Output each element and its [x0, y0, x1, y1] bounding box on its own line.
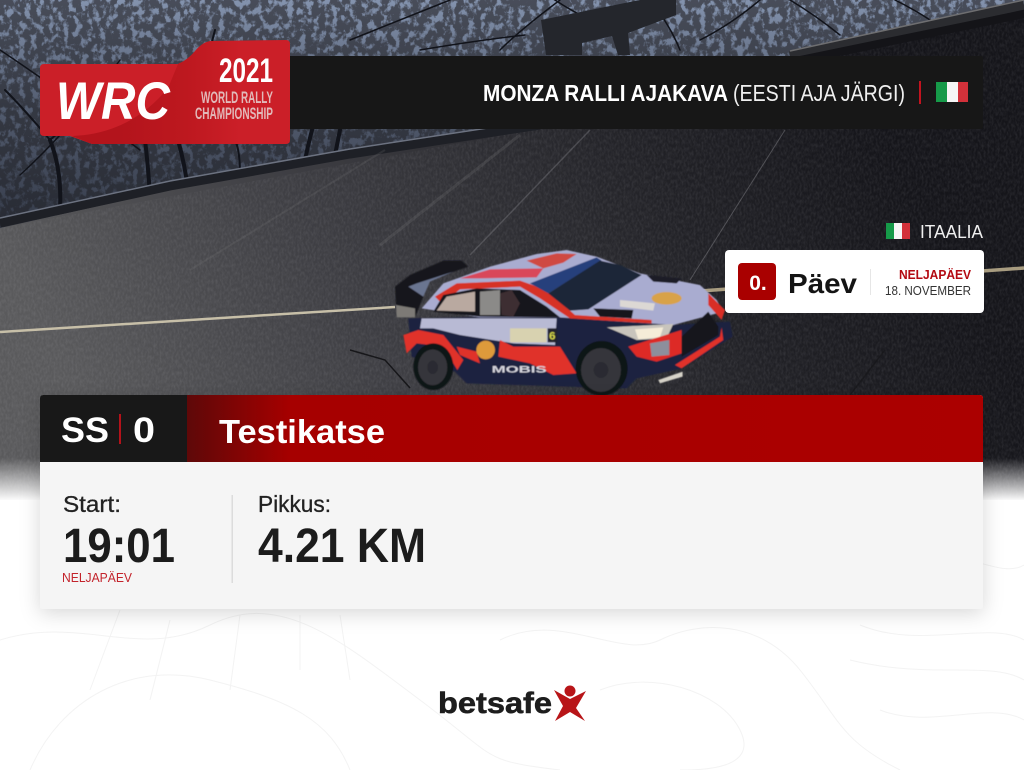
day number badge: 0.	[749, 272, 767, 295]
rear wheel	[413, 343, 453, 390]
length block: Pikkus:	[258, 491, 331, 517]
country label	[886, 222, 983, 242]
front wheel	[576, 341, 628, 396]
betsafe logo: betsafe	[438, 687, 552, 720]
icon: Italian flag	[936, 82, 968, 102]
background topographic lines	[0, 556, 1024, 770]
rear wing	[395, 261, 468, 317]
car body	[403, 250, 733, 388]
day label: Päev	[788, 268, 857, 299]
car body: MOBIS	[492, 365, 547, 375]
year: 2021	[219, 52, 273, 90]
stage number block: 0	[133, 411, 155, 450]
date: 18. NOVEMBER	[885, 284, 971, 298]
start time block: NELJAPÄEV	[62, 570, 132, 585]
header bar	[270, 56, 983, 129]
length block: 4.21 KM	[258, 520, 426, 573]
championship: CHAMPIONSHIP	[195, 105, 273, 123]
day card	[725, 250, 984, 313]
title subtitle: (EESTI AJA JÄRGI)	[733, 80, 905, 106]
car body: 6	[549, 330, 555, 342]
start time block	[62, 491, 175, 585]
weekday: NELJAPÄEV	[899, 267, 972, 282]
stage name bar: Testikatse	[219, 413, 385, 450]
background photo: Monza banking with trees	[0, 0, 1024, 510]
icon: Italian flag small	[886, 223, 910, 239]
stage panel	[40, 395, 983, 609]
title text: MONZA RALLI AJAKAVA	[483, 80, 728, 106]
divider	[919, 81, 921, 104]
icon: betsafe star figure	[554, 686, 586, 721]
WRC logo	[40, 40, 290, 144]
world rally: WORLD RALLY	[201, 89, 273, 107]
stage name bar	[187, 395, 983, 462]
betsafe logo	[438, 686, 586, 721]
rally car	[395, 250, 733, 396]
stage number block	[40, 395, 187, 462]
country name: ITAALIA	[920, 222, 983, 242]
length block	[258, 491, 426, 573]
day number badge	[738, 263, 776, 300]
stage number block: SS	[61, 411, 109, 450]
WRC wordmark: WRC	[56, 72, 171, 131]
start time block: 19:01	[63, 520, 175, 573]
start time block: Start:	[63, 491, 121, 517]
